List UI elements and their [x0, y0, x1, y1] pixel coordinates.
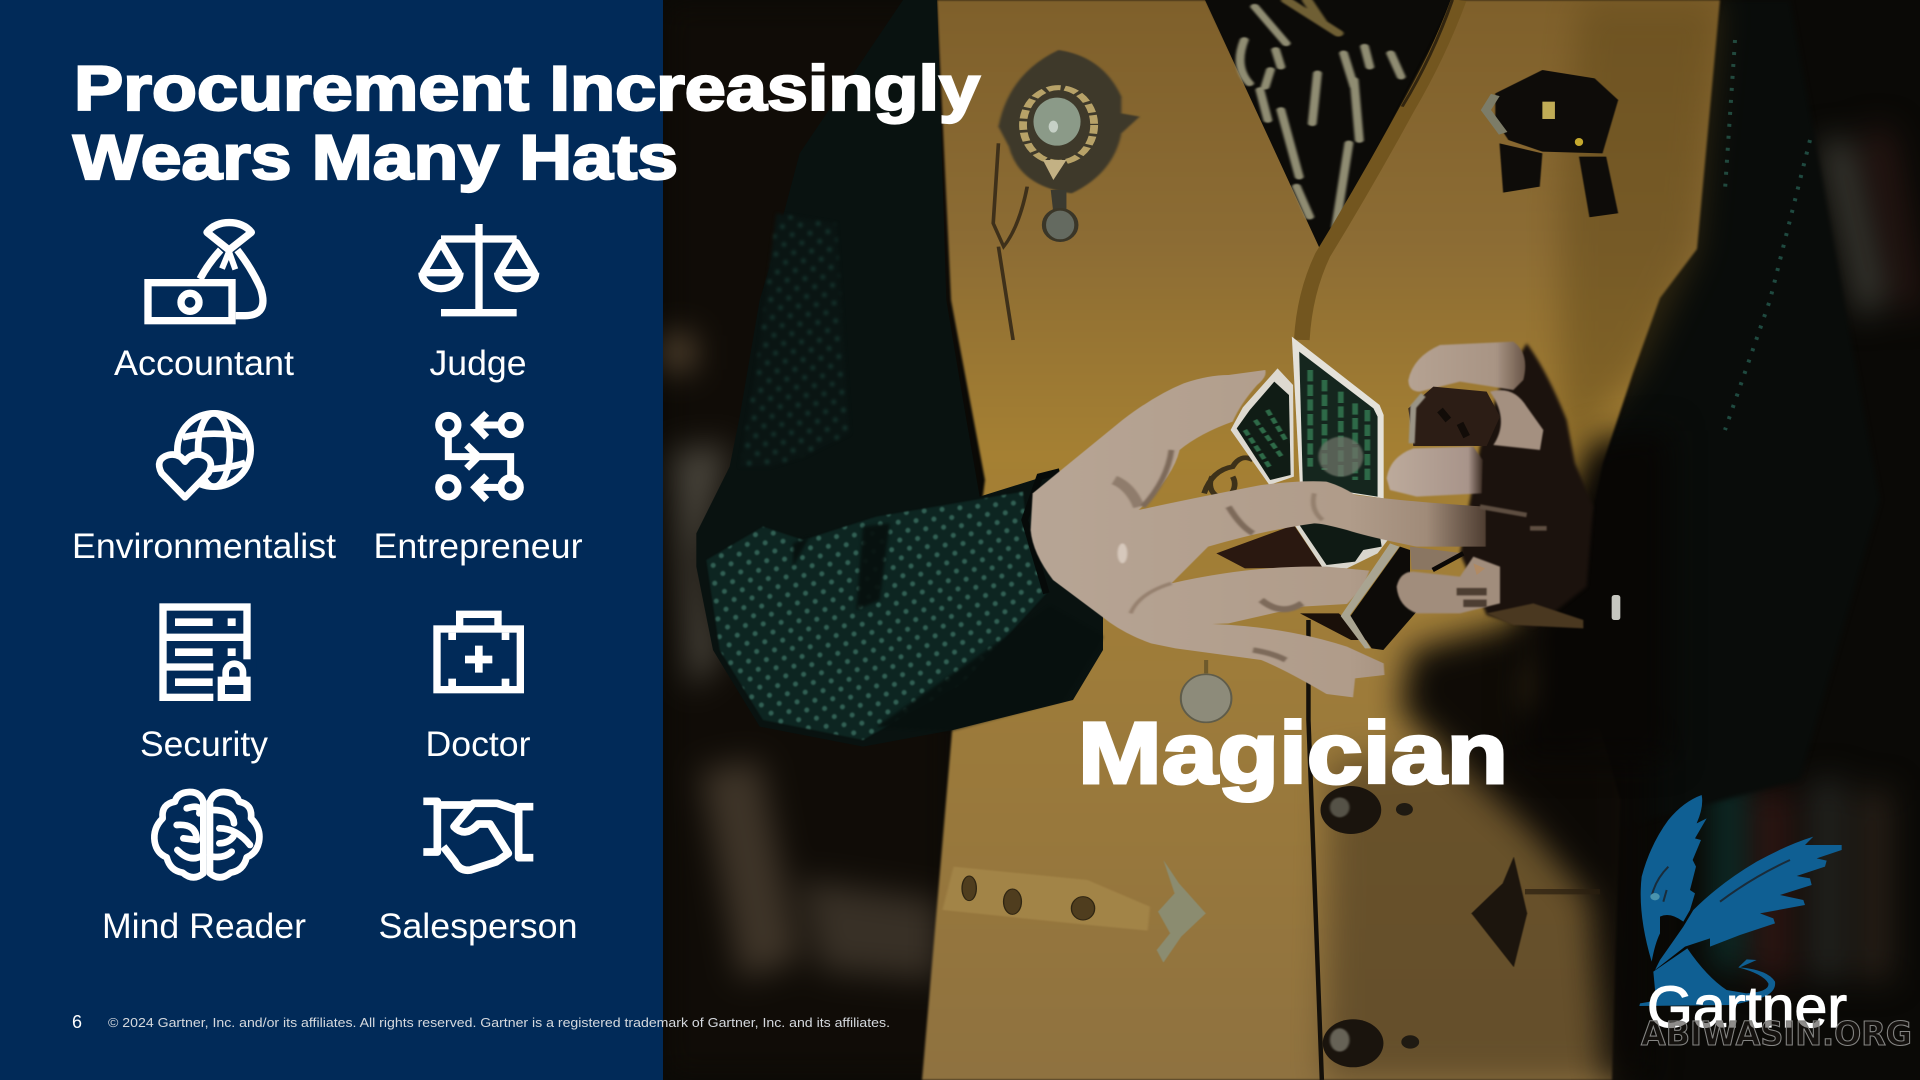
logo: Gartner griffin [1639, 795, 1842, 1006]
icon: judge [422, 224, 536, 313]
right hand lower finger [1397, 557, 1500, 613]
front playing card [1292, 337, 1384, 498]
left navy panel [0, 0, 663, 1080]
knuckle marks [1480, 507, 1547, 528]
watch glint [1612, 595, 1620, 620]
icon: environmentalist [159, 413, 251, 497]
right sleeve dot highlights [1725, 40, 1810, 430]
icon: entrepreneur [439, 413, 520, 500]
label: accountant: Accountant [114, 344, 294, 383]
ornament behind cards [1204, 458, 1253, 497]
right brooch [1495, 70, 1618, 217]
label: salesperson: Salesperson [378, 907, 578, 946]
big word: Magician: Magician [1078, 705, 1508, 802]
right sleeve [1540, 0, 1880, 830]
logo wordmark: Gartner: Gartner [1647, 975, 1847, 1040]
finger shading [1114, 450, 1322, 660]
title: Wears Many Hats [73, 123, 678, 193]
right hand upper finger [1387, 447, 1483, 497]
vest details lower: seam, buttons, pocket, ornaments [942, 620, 1600, 1080]
coin on vest [1181, 660, 1231, 722]
icon: accountant [148, 223, 263, 321]
sleeve dotted highlights [740, 213, 850, 467]
label: judge: Judge [430, 344, 526, 383]
right half vest darkening [1325, 740, 1620, 1080]
hands and cards [1031, 337, 1620, 697]
title [73, 54, 980, 193]
icon: security [163, 607, 257, 704]
left hand with index, middle and ring fingers [1031, 370, 1486, 697]
patch behind lower finger [1410, 547, 1463, 570]
right hand rear, curled finger and held cards [1408, 342, 1593, 628]
label: security: Security [140, 725, 268, 764]
left brooch [998, 50, 1140, 241]
sleeve cuff in shadow [1487, 603, 1583, 628]
watermark: ABIWASIN.ORG [1641, 1014, 1912, 1053]
title: Procurement Increasingly [74, 54, 980, 124]
icon: salesperson handshake [423, 801, 533, 870]
dark card deck [1350, 547, 1417, 650]
blurred bookshelf background [663, 0, 1920, 1080]
icon: doctor [437, 614, 520, 690]
label: entrepreneur: Entrepreneur [374, 527, 583, 566]
left sleeve [696, 0, 1103, 747]
rear playing card [1231, 368, 1294, 485]
vest details upper: brooches, shirt, lapel [993, 0, 1618, 340]
suede vest [922, 0, 1720, 1080]
lower card fragments [1216, 525, 1322, 568]
copyright footer: © 2024 Gartner, Inc. and/or its affiliates. All rights reserved. Gartner is a registered trademark of Gartner, Inc. and its affiliates. [108, 1015, 890, 1030]
label: mind reader: Mind Reader [102, 907, 306, 946]
page number: 6 [72, 1012, 82, 1032]
icon: mind reader brain [154, 792, 259, 877]
label: environmentalist: Environmentalist [72, 527, 336, 566]
label: doctor: Doctor [426, 725, 531, 764]
